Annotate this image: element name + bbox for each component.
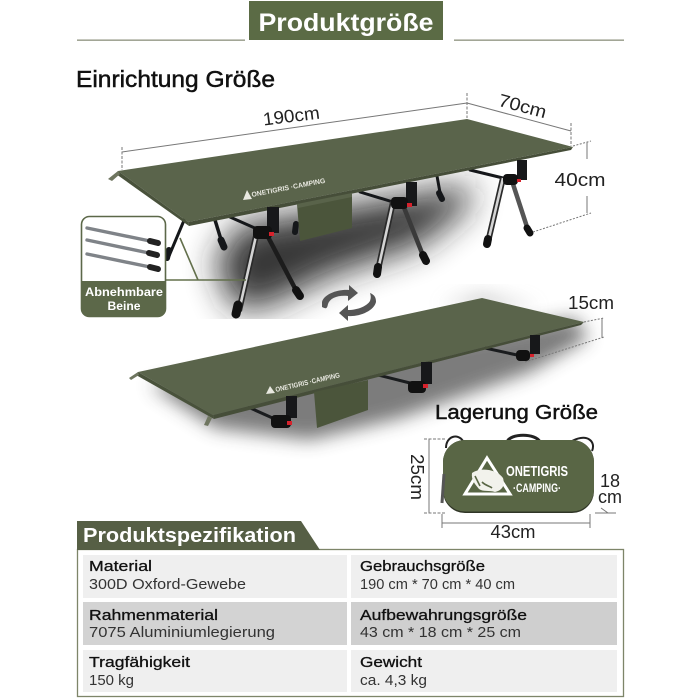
panel: Produktspezifikation: Produktspezifikation [83,525,296,547]
dimensions: folded cot [525,318,604,362]
hinge 1 [271,396,297,428]
cell: Aufbewahrungsgröße: 43 cm * 18 cm * 25 cm [360,625,521,641]
shadow under raised cot [215,185,470,310]
fabric bed [138,298,584,415]
corner strap [108,171,120,181]
label: 70cm: 70cm [496,90,549,122]
cell: Material: Material [89,559,152,575]
logo bear [472,470,504,492]
frame [78,550,624,696]
leg set 2 [377,182,426,274]
dimensions: raised cot [122,93,591,232]
storage bag: ·CAMPING· [513,481,561,495]
logo triangle [465,458,510,494]
tab heading [77,521,320,550]
label: 40cm: 40cm [554,170,606,190]
heading: Einrichtung Größe: Einrichtung Größe [76,66,275,92]
storage bag [442,435,594,513]
cell: Tragfähigkeit: Tragfähigkeit [89,655,190,671]
shadow under folded cot [150,318,588,440]
label: 15cm: 15cm [568,293,614,313]
raised cot [108,119,573,314]
cell: Tragfähigkeit [83,650,347,692]
header: Produktgröße [77,1,624,41]
cell: Material [83,555,347,598]
icon: rotation arrows [322,285,376,321]
cell: Aufbewahrungsgröße: Aufbewahrungsgröße [360,608,527,624]
folded cot [129,298,584,428]
rear legs and crossbars [167,170,503,258]
logo text: ONETIGRIS [506,463,568,480]
leg set 1 [236,207,300,314]
cell: Gewicht: ca. 4,3 kg [360,673,427,689]
corner straps [129,372,139,380]
crossbars [248,348,517,420]
logo on folded cot: ONETIGRIS ·CAMPING [275,372,341,394]
hinge 3 [516,335,540,361]
cell: Material: 300D Oxford-Gewebe [89,577,246,593]
logo on cot: ONETIGRIS ·CAMPING [251,178,327,199]
label: 190cm: 190cm [262,103,321,129]
cell: Gebrauchsgröße [351,555,617,598]
cell: Tragfähigkeit: 150 kg [89,673,134,689]
panel: Produktspezifikation [77,521,624,696]
callout lines: detachable legs [166,238,246,280]
label: 18 cm: 18 [600,471,620,491]
heading: Lagerung Größe: Lagerung Größe [435,402,598,424]
shadow behind folded cot [440,293,540,308]
inset: Abnehmbare Beine [81,216,166,317]
inset: Abnehmbare Beine: Beine [108,301,140,313]
hinge 2 [408,362,432,393]
label: 25cm: 25cm [407,454,427,500]
cell: Rahmenmaterial: Rahmenmaterial [89,608,218,624]
cell: Rahmenmaterial: 7075 Aluminiumlegierung [89,625,275,641]
leg set 3 [487,160,530,244]
cell: Aufbewahrungsgröße [351,602,617,645]
cell: Gewicht: Gewicht [360,655,422,671]
label: 18 cm: cm [598,487,622,507]
cell: Gewicht [351,650,617,692]
cell: Gebrauchsgröße: Gebrauchsgröße [360,559,485,575]
inset: Abnehmbare Beine: Abnehmbare [85,287,163,299]
label: 18 cm [598,471,622,507]
cell: Gebrauchsgröße: 190 cm * 70 cm * 40 cm [360,577,515,593]
pocket [297,193,352,241]
pocket [314,380,368,428]
icon: three rods [87,228,158,269]
dimensions: bag [424,439,616,528]
header: Produktgröße: Produktgröße [258,9,434,37]
fabric bed [118,119,573,222]
label: 43cm: 43cm [490,522,536,542]
cell: Rahmenmaterial [83,602,347,645]
